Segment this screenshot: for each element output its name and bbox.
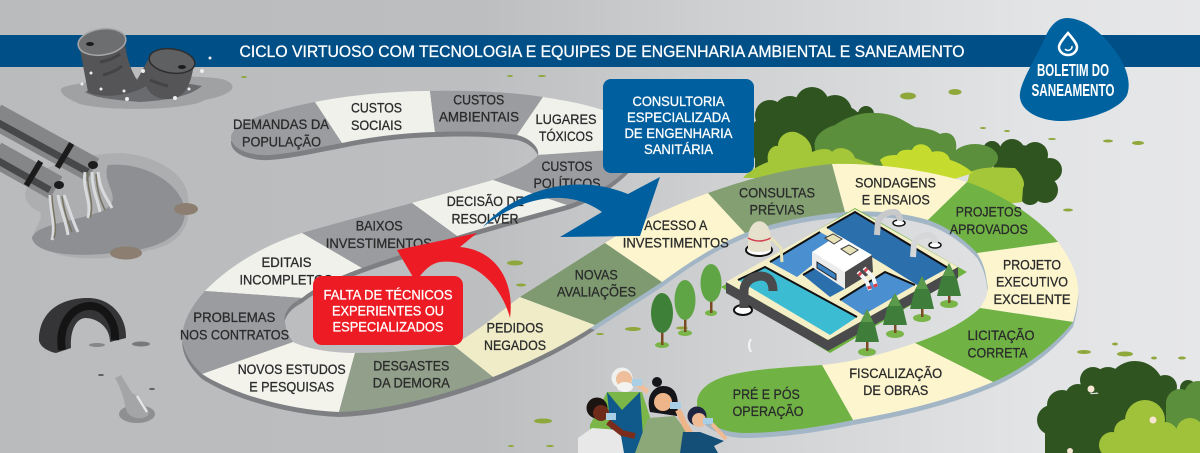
step: licitação correta [915,308,1073,382]
step: desgastes da demora: DESGASTES [373,358,449,373]
step: demandas da população: POPULAÇÃO [242,134,321,149]
people drinking water [578,368,726,453]
logo: boletim do saneamento [1020,18,1129,121]
callout: consultoria especializada: ESPECIALIZADA [627,110,730,125]
step: editais incompletos: INCOMPLETOS [240,272,332,287]
step: projeto executivo excelente: PROJETO [1003,257,1061,272]
step: novos estudos e pesquisas [202,342,355,412]
step: consultas prévias [708,164,845,233]
grey pipes [877,212,941,257]
step: problemas nos contratos [180,291,302,374]
step: projeto executivo excelente: EXCELENTE [994,292,1070,307]
step: custos políticos: CUSTOS [542,159,592,174]
step: decisão de resolver: DECISÃO DE [447,194,524,209]
step: fiscalização de obras [822,343,993,420]
woman [635,377,693,453]
tire [39,298,150,376]
step: decisão de resolver [412,180,567,236]
step: sondagens e ensaios: SONDAGENS [855,175,936,190]
callout: falta de técnicos: EXPERIENTES OU [332,303,444,318]
bottle [115,375,155,423]
red arrow [397,233,511,318]
step: custos políticos: POLÍTICOS [534,176,600,191]
older man [590,368,650,453]
boy in white [578,398,635,453]
dome tank [746,221,782,262]
step: baixos investimentos [302,203,457,268]
step: projeto executivo excelente: EXECUTIVO [996,275,1068,290]
step: lugares tóxicos [517,97,637,155]
step: projeto executivo excelente [977,242,1078,322]
step: problemas nos contratos: PROBLEMAS [193,310,275,325]
polluted puddle [25,153,198,260]
right green bush [952,144,998,172]
blue arrow [483,177,660,237]
step: pré e pós operação [697,365,853,433]
step: demandas da população [231,102,342,155]
step: novos estudos e pesquisas: NOVOS ESTUDOS [238,362,346,377]
round trees [651,264,722,348]
title band [0,35,1200,67]
callout: falta de técnicos [313,276,463,345]
step: pré e pós operação: PRÉ E PÓS [733,387,800,402]
step: sondagens e ensaios: E ENSAIOS [862,192,930,207]
step: projetos aprovados: APROVADOS [950,222,1028,237]
logo: boletim do saneamento: SANEAMENTO [1032,80,1114,100]
step: pré e pós operação: OPERAÇÃO [732,404,804,419]
step: custos sociais [315,91,435,143]
step: custos ambientais: AMBIENTAIS [439,110,519,125]
step: novas avaliações: AVALIAÇÕES [557,285,636,300]
step: custos ambientais [430,91,543,135]
step: consultas prévias: CONSULTAS [739,185,815,200]
step: custos sociais: SOCIAIS [351,118,402,133]
step: projetos aprovados [928,182,1058,253]
back dark bush [747,87,874,180]
step: fiscalização de obras: DE OBRAS [863,383,928,398]
centre lime bush [880,144,973,182]
ground flecks [241,75,1186,447]
callout: falta de técnicos: FALTA DE TÉCNICOS [324,287,452,302]
callout: consultoria especializada [603,79,754,173]
step: lugares tóxicos: TÓXICOS [539,129,593,144]
bottom right bushes [1037,361,1200,453]
dark pipe [734,276,773,315]
water treatment plant [721,208,967,353]
step: baixos investimentos: BAIXOS [356,219,403,234]
step: demandas da população: DEMANDAS DA [233,117,329,132]
barrels with spill [61,26,232,109]
middle green bush [815,113,962,172]
step: editais incompletos [205,233,362,298]
step: custos sociais: CUSTOS [351,101,402,116]
left lime bush [743,132,875,178]
road shadow [182,96,1078,438]
step: desgastes da demora [339,345,493,412]
step: acesso a investimentos [605,193,745,282]
icon: water drop [1059,33,1077,55]
step: editais incompletos: EDITAIS [262,255,312,270]
step: baixos investimentos: INVESTIMENTOS [326,236,432,251]
right lime bush [965,167,1024,205]
step: decisão de resolver: RESOLVER [452,211,519,226]
step: acesso a investimentos: ACESSO A [644,218,707,233]
callout: consultoria especializada: CONSULTORIA [632,94,724,109]
logo: boletim do saneamento: BOLETIM DO [1037,60,1109,80]
callout: falta de técnicos: ESPECIALIZADOS [332,319,444,334]
callout: consultoria especializada: SANITÁRIA [644,142,713,157]
step: novas avaliações [520,243,662,325]
step: licitação correta: LICITAÇÃO [968,328,1034,343]
red and white pipes [858,268,876,290]
step: pedidos negados: PEDIDOS [486,321,544,336]
plant building [812,234,873,289]
conifer trees [855,263,961,356]
callout: consultoria especializada: DE ENGENHARIA [624,126,732,141]
step: problemas nos contratos: NOS CONTRATOS [180,327,289,342]
white curb mark [749,339,751,352]
step: lugares tóxicos: LUGARES [536,112,596,127]
step: custos políticos [493,148,640,205]
step: novos estudos e pesquisas: E PESQUISAS [249,379,334,394]
young boy [680,406,726,453]
step: pedidos negados [453,297,595,377]
step: projetos aprovados: PROJETOS [956,205,1022,220]
title: CICLO VIRTUOSO COM TECNOLOGIA E EQUIPES DE ENGENHARIA AMBIENTAL E SANEAMENTO [240,43,965,61]
step: licitação correta: CORRETA [968,345,1028,360]
step: sondagens e ensaios [832,164,967,220]
step: fiscalização de obras: FISCALIZAÇÃO [849,366,942,381]
right dark bush [983,139,1062,205]
step: pedidos negados: NEGADOS [484,338,546,353]
step: custos ambientais: CUSTOS [453,92,504,107]
sewage pipes [0,116,112,240]
step: desgastes da demora: DA DEMORA [373,376,450,391]
step: novas avaliações: NOVAS [575,267,618,282]
step: consultas prévias: PRÉVIAS [750,202,804,217]
step: acesso a investimentos: INVESTIMENTOS [623,235,729,250]
